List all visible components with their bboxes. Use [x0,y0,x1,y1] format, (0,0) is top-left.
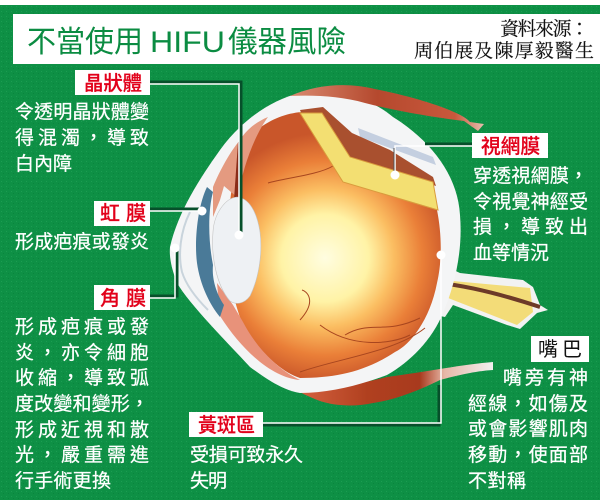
callout: retina: 視網膜 [481,135,540,158]
callout: cornea [94,244,180,310]
ciliary body upper [213,117,268,217]
callout: retina [390,133,548,180]
title: 儀器風險 [228,26,346,59]
retina layer [300,113,438,210]
ciliary shadow [236,142,240,200]
source credit: 資料來源： [500,14,589,41]
sclera [170,91,461,393]
text: cornea risk: 行手術更換 [15,470,111,492]
title: HIFU [150,26,225,59]
label: mouth: 嘴 巴 [538,338,582,361]
source credit: 周伯展及陳厚毅醫生 [414,36,594,63]
text: macula risk [190,444,303,492]
callout: macula [189,250,446,437]
text: cornea risk: 形成疤痕或發 [15,316,149,338]
title [27,26,346,59]
callout: lens: 晶狀體 [84,72,142,95]
text: cornea risk: 收縮，導致弧 [15,367,149,389]
cut-away outer wedge [358,128,436,165]
bottom muscle [296,362,493,405]
text: retina risk [473,165,588,264]
text: mouth risk: 嘴旁有神 [503,367,588,389]
text: iris risk: 形成疤痕或發炎 [15,231,149,253]
eye cross-section illustration [170,85,548,405]
title banner [13,14,600,64]
text: retina risk: 血等情況 [473,242,549,264]
iris [196,187,224,317]
callout: macula: 黃斑區 [198,414,255,437]
text: retina risk: 損，導致出 [473,216,588,238]
blood vessels [268,166,425,372]
callout: cornea: 角 膜 [100,287,146,310]
text: macula risk: 受損可致永久 [190,444,303,466]
callout: iris [94,201,206,226]
top muscle [290,85,484,131]
source credit [414,14,594,63]
label: mouth [531,336,589,362]
lens [213,197,261,303]
text: cornea risk: 光，嚴重需進 [15,444,149,466]
text: lens risk: 得混濁，導致 [15,127,149,149]
text: lens risk: 令透明晶狀體變 [15,101,149,123]
text: mouth risk: 或會影響肌肉 [468,418,588,440]
text: mouth risk: 移動，使面部 [468,444,588,466]
text: retina risk: 令視覺神經受 [473,191,588,213]
text: cornea risk: 形成近視和散 [15,419,149,441]
callout: iris: 虹 膜 [100,202,146,225]
text: mouth risk [468,367,588,492]
ciliary body lower [217,283,300,380]
text: mouth risk: 經線，如傷及 [468,393,588,415]
cornea edge [180,212,208,310]
title: 不當使用 [27,26,143,59]
text: cornea risk [15,316,149,492]
text: macula risk: 失明 [190,470,227,492]
text: cornea risk: 炎，亦令細胞 [15,342,149,364]
text: lens risk: 白內障 [15,153,72,175]
callout: lens [75,70,244,240]
text: mouth risk: 不對稱 [468,470,526,492]
text: retina risk: 穿透視網膜， [473,165,588,187]
choroid layer [300,107,436,186]
text: cornea risk: 度改變和變形， [15,393,149,415]
fundus interior [228,112,441,378]
text: lens risk [15,101,149,175]
optic nerve [435,262,548,329]
